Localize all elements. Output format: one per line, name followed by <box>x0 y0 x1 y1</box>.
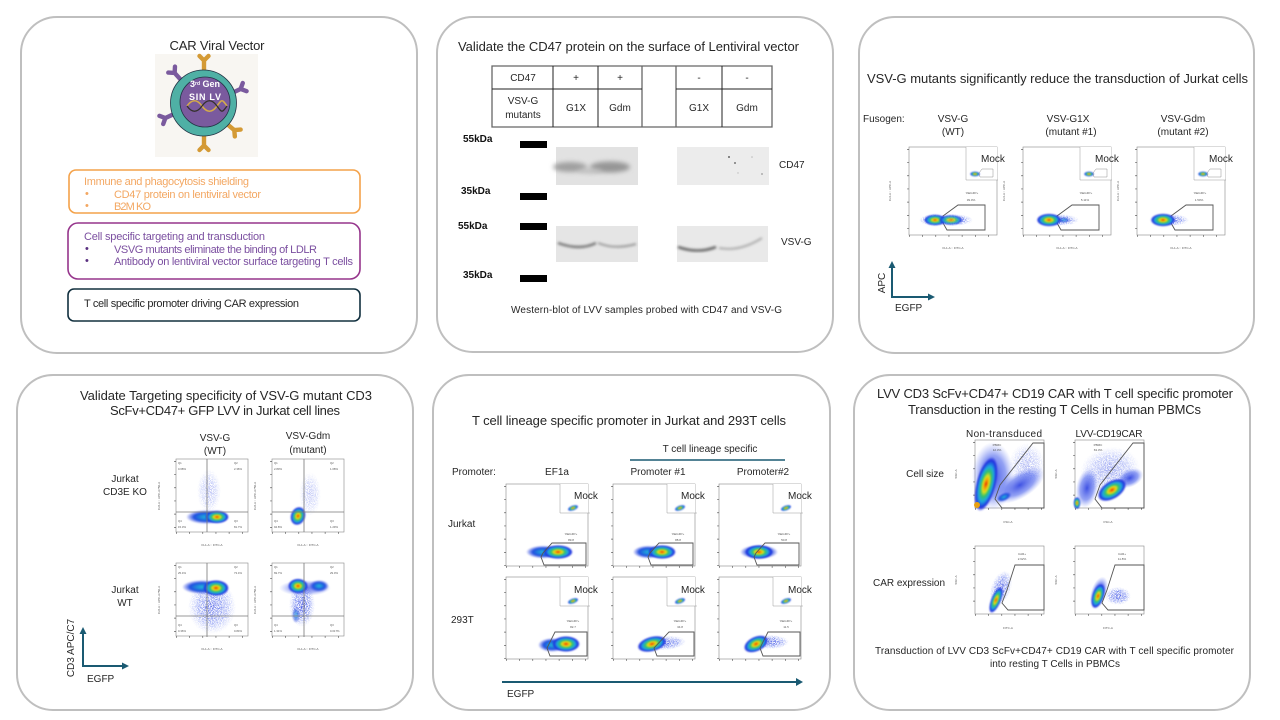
row and column labels <box>448 467 790 626</box>
flow plot: CD3E KO, WT <box>157 459 248 547</box>
flow plot: VSV-Gdm: %EGFP+ <box>1194 191 1207 195</box>
mock labels: Mock <box>574 585 599 596</box>
bracket: T cell lineage specific: T cell lineage specific <box>663 444 757 455</box>
column labels: VSV-G1X <box>1047 114 1090 125</box>
flow plot: VSV-Gdm: 1.50% <box>1195 198 1204 202</box>
flow plot: 293T promoter 1 <box>612 577 697 660</box>
arrow: EGFP axis <box>502 678 803 700</box>
blot: CD47 negative <box>677 147 769 185</box>
flow plot: VSV-Gdm: Mock <box>1209 154 1234 165</box>
label: CD47: CD47 <box>779 160 805 171</box>
flow plot: VSV-G1X: Mock <box>1095 154 1120 165</box>
heading: LVV CD19 CAR <box>877 386 1234 417</box>
flow plot: CAR transduced: SSC-A <box>1054 575 1058 585</box>
heading: LVV CD19 CAR: Transduction in the resting T Cells in human PBMCs <box>908 402 1202 417</box>
flow plot: CD3E KO, WT: Q4 <box>178 519 182 523</box>
table: sample layout: Gdm <box>609 103 631 114</box>
row and column labels: WT <box>117 598 133 609</box>
flow plot: CAR non-transduced: 2.62% <box>1018 557 1027 561</box>
flow plot: CD3E KO, mutant: Q3 <box>330 519 334 523</box>
caption: transduction: Transduction of LVV CD3 ScFv+CD47+ CD19 CAR with T cell specific promoter <box>875 646 1235 657</box>
flow plot: CD3E KO, WT: FL1-A :: FITC-A <box>201 543 223 547</box>
row and column labels: (mutant) <box>289 445 327 456</box>
molecular weight markers: 55kDa <box>458 221 488 232</box>
molecular weight markers: 35kDa <box>463 270 493 281</box>
column labels <box>863 114 1209 138</box>
heading: CAR Viral Vector: CAR Viral Vector <box>170 38 265 53</box>
callout: cell specific targeting: VSVG mutants eliminate the binding of LDLR <box>114 244 317 256</box>
flow plot: Jurkat WT, mutant: Q4 <box>274 623 278 627</box>
flow plot: Jurkat promoter 2 <box>718 484 803 567</box>
row and column labels: EF1a <box>545 467 569 478</box>
table: sample layout: VSV-G <box>508 96 538 107</box>
arrow: APC vs EGFP axes: APC <box>877 273 888 293</box>
arrow: CD3 vs EGFP axes: CD3 APC/C7 <box>66 618 77 677</box>
row and column labels: VSV-G <box>200 433 230 444</box>
panel: CAR viral vector <box>21 17 417 353</box>
heading: validate targeting: ScFv+CD47+ GFP LVV in Jurkat cell lines <box>110 403 340 418</box>
heading: validate targeting <box>80 388 372 418</box>
heading: LVV CD19 CAR: LVV CD3 ScFv+CD47+ CD19 CAR with T cell specific promoter <box>877 386 1234 401</box>
flow plot: CD3E KO, WT: FL8-A :: APC-A750-A <box>157 482 161 510</box>
table: sample layout: Gdm <box>736 103 758 114</box>
flow plot: CAR non-transduced: SSC-A <box>954 575 958 585</box>
flow plot: Jurkat WT, WT: FL1-A :: FITC-A <box>201 647 223 651</box>
mock labels <box>574 491 813 596</box>
callout: T cell promoter: T cell specific promoter driving CAR expression <box>84 298 299 310</box>
flow plot: Jurkat WT, mutant: Q3 <box>330 623 334 627</box>
flow plot: VSV-G1X: 5.11% <box>1081 198 1089 202</box>
flow plot: cell size non-transduced: 12.3% <box>993 448 1002 452</box>
panel: targeting specificity <box>17 375 413 710</box>
table: sample layout <box>492 66 772 127</box>
flow plot: CD3E KO, mutant: 2.80% <box>274 467 282 471</box>
flow plot: Jurkat promoter 1 <box>612 484 697 567</box>
icon: lentiviral vector particle: Gen <box>200 79 220 89</box>
flow plot: cell size non-transduced: FSC-A <box>1004 520 1012 524</box>
flow plot: cell size transduced: FSC-A <box>1104 520 1112 524</box>
mock labels: Mock <box>788 585 813 596</box>
flow plot: CAR transduced: CAR+ <box>1118 552 1126 556</box>
flow plot: Jurkat promoter 2: %EGFP+ <box>778 532 791 536</box>
column labels: (WT) <box>942 127 964 138</box>
caption: transduction: into resting T Cells in PBMCs <box>990 659 1120 670</box>
blot: CD47 positive <box>553 147 638 185</box>
arrow: APC vs EGFP axes: EGFP <box>895 303 923 314</box>
row and column labels: CD3E KO <box>103 487 147 498</box>
arrow: CD3 vs EGFP axes: EGFP <box>87 674 115 685</box>
callout: T cell promoter <box>68 289 360 321</box>
flow plot: VSV-G WT: 39.0% <box>967 198 976 202</box>
flow plot: Jurkat EF1a: 89.8 <box>568 538 574 542</box>
table: sample layout: CD47 <box>510 73 536 84</box>
row and column labels: Jurkat <box>111 474 139 485</box>
table: sample layout: - <box>697 73 701 84</box>
heading: validate targeting: Validate Targeting specificity of VSV-G mutant CD3 <box>80 388 372 403</box>
heading: VSV-G mutants: VSV-G mutants significantly reduce the transduction of Jurkat cells <box>867 71 1248 86</box>
flow plot: Jurkat promoter 1: %EGFP+ <box>672 532 685 536</box>
flow plot: VSV-G WT <box>888 147 1006 250</box>
flow plot: cell size transduced: PBMC <box>1094 443 1103 447</box>
flow plot: Jurkat EF1a <box>505 484 590 567</box>
mock labels: Mock <box>681 585 706 596</box>
callout: immune shielding: Immune and phagocytosis shielding <box>84 176 249 188</box>
row and column labels <box>873 429 1142 589</box>
flow plot: VSV-G1X: FL6-A :: APC-A <box>1002 181 1006 201</box>
flow plot: 293T promoter 2 <box>718 577 803 660</box>
row and column labels: CAR expression <box>873 578 945 589</box>
flow plot: CAR non-transduced <box>954 546 1044 630</box>
column labels: VSV-Gdm <box>1161 114 1205 125</box>
caption: transduction <box>875 646 1235 670</box>
flow plot: CD3E KO, WT: 15.3% <box>178 525 186 529</box>
callout: cell specific targeting: Cell specific targeting and transduction <box>84 231 265 243</box>
flow plot: 293T EF1a: %EGFP+ <box>567 619 580 623</box>
flow plot: VSV-G1X <box>1002 147 1120 250</box>
flow plot: VSV-G WT: %EGFP+ <box>966 191 979 195</box>
flow plot: VSV-G WT: FL1-A :: FITC-A <box>942 246 964 250</box>
mock labels: Mock <box>574 491 599 502</box>
flow plot: Jurkat WT, WT: 73.4% <box>234 571 242 575</box>
flow plot: Jurkat WT, mutant: FL8-A :: APC-A750-A <box>253 586 257 614</box>
table: sample layout: + <box>573 73 579 84</box>
heading: T cell lineage promoter: T cell lineage specific promoter in Jurkat and 293T cells <box>472 413 786 428</box>
flow plot: Jurkat WT, WT: Q3 <box>234 623 238 627</box>
flow plot: 293T promoter 2: 11.5 <box>783 625 789 629</box>
flow plot: 293T EF1a <box>505 577 590 660</box>
table: sample layout: mutants <box>505 110 541 121</box>
row and column labels: (WT) <box>204 446 226 457</box>
flow plot: CD3E KO, WT: Q2 <box>234 461 238 465</box>
flow plot: Jurkat WT, mutant: 29.0% <box>330 571 338 575</box>
flow plot: 293T promoter 1: 34.8 <box>677 625 683 629</box>
flow plot: cell size non-transduced: PBMC <box>993 443 1002 447</box>
heading: validate CD47: Validate the CD47 protein on the surface of Lentiviral vector <box>458 39 800 54</box>
flow plot: CD3E KO, mutant: FL1-A :: FITC-A <box>297 543 319 547</box>
flow plot: Jurkat WT, mutant: Q2 <box>330 565 334 569</box>
icon: lentiviral vector particle: 3 <box>190 79 195 89</box>
flow plot: CD3E KO, mutant <box>253 459 344 547</box>
flow plot: cell size transduced <box>1054 440 1146 524</box>
panel: resting T cell transduction <box>854 375 1250 710</box>
callout: cell specific targeting: • <box>85 243 89 255</box>
flow plot: Jurkat WT, WT: Q4 <box>178 623 182 627</box>
blot: VSV-G right <box>677 226 768 262</box>
flow plot: cell size non-transduced: SSC-A <box>954 469 958 479</box>
flow plot: CAR transduced: 11.8% <box>1118 557 1126 561</box>
flow plot: Jurkat WT, WT: Q2 <box>234 565 238 569</box>
flow plot: cell size transduced: SSC-A <box>1054 469 1058 479</box>
flow plot: Jurkat WT, mutant: 0.017% <box>330 629 340 633</box>
row and column labels: Jurkat <box>111 585 139 596</box>
flow plot: 293T EF1a: 82.7 <box>570 625 576 629</box>
flow plot: cell size non-transduced <box>954 440 1051 524</box>
panel: VSV-G mutants transduction <box>859 17 1254 353</box>
flow plot: VSV-G1X: FL1-A :: FITC-A <box>1056 246 1078 250</box>
mock labels: Mock <box>788 491 813 502</box>
flow plot: 293T promoter 1: %EGFP+ <box>674 619 687 623</box>
panel: CD47 western blot <box>437 17 833 352</box>
table: sample layout: - <box>745 73 749 84</box>
flow plot: CD3E KO, WT: Q1 <box>178 461 182 465</box>
row and column labels: 293T <box>451 615 474 626</box>
flow plot: VSV-Gdm: FL6-A :: APC-A <box>1116 181 1120 201</box>
label: VSV-G: VSV-G <box>781 237 812 248</box>
flow plot: CD3E KO, mutant: 1.29% <box>330 525 338 529</box>
arrow: CD3 vs EGFP axes <box>66 618 129 685</box>
panel: T cell lineage promoter <box>433 375 830 710</box>
flow plot: Jurkat WT, mutant: FL1-A :: FITC-A <box>297 647 319 651</box>
callout: cell specific targeting: Antibody on lentiviral vector surface targeting T cells <box>114 256 354 268</box>
row and column labels: LVV-CD19CAR <box>1076 429 1142 440</box>
row and column labels: Promoter#2 <box>737 467 790 478</box>
flow plot: Jurkat WT, WT: 25.4% <box>178 571 186 575</box>
flow plot: VSV-G WT: FL6-A :: APC-A <box>888 181 892 201</box>
flow plot: Jurkat WT, WT: FL8-A :: APC-A750-A <box>157 586 161 614</box>
arrow: EGFP axis: EGFP <box>507 689 535 700</box>
flow plot: cell size transduced: 63.3% <box>1094 448 1103 452</box>
flow plot: Jurkat promoter 1: 88.8 <box>675 538 681 542</box>
table: sample layout: G1X <box>566 103 586 114</box>
column labels: Fusogen: <box>863 114 905 125</box>
table: sample layout: G1X <box>689 103 709 114</box>
flow plot: CAR non-transduced: FITC-A <box>1003 626 1013 630</box>
flow plot: Jurkat WT, mutant: 1.31% <box>274 629 282 633</box>
flow plot: CD3E KO, WT: Q3 <box>234 519 238 523</box>
table: sample layout: + <box>617 73 623 84</box>
column labels: VSV-G <box>938 114 968 125</box>
flow plot: VSV-G1X: %EGFP+ <box>1080 191 1093 195</box>
flow plot: Jurkat promoter 2: 50.8 <box>781 538 787 542</box>
flow plot: Jurkat WT, WT <box>157 563 248 651</box>
callout: immune shielding: CD47 protein on lentiviral vector <box>114 189 261 201</box>
flow plot: Jurkat WT, WT: 0.84% <box>234 629 242 633</box>
icon: lentiviral vector particle: rd <box>195 81 200 87</box>
flow plot: CD3E KO, mutant: 1.08% <box>330 467 338 471</box>
callout: immune shielding: B2M KO <box>114 201 151 213</box>
row and column labels: Jurkat <box>448 519 475 530</box>
column labels: (mutant #1) <box>1045 127 1097 138</box>
row and column labels <box>103 431 330 609</box>
mock labels: Mock <box>681 491 706 502</box>
flow plot: Jurkat WT, WT: 0.36% <box>178 629 186 633</box>
row and column labels: Cell size <box>906 469 944 480</box>
callout: cell specific targeting <box>68 223 360 279</box>
flow plot: 293T promoter 2: %EGFP+ <box>780 619 793 623</box>
blot: VSV-G left <box>556 226 638 262</box>
flow plot: CD3E KO, WT: 0.68% <box>178 467 186 471</box>
flow plot: Jurkat WT, WT: Q1 <box>178 565 182 569</box>
flow plot: CD3E KO, WT: 2.36% <box>234 467 242 471</box>
callout: immune shielding: • <box>85 200 89 212</box>
callout: cell specific targeting: • <box>85 255 89 267</box>
arrow: APC vs EGFP axes <box>877 261 935 314</box>
flow plot: VSV-G WT: Mock <box>981 154 1006 165</box>
column labels: (mutant #2) <box>1157 127 1209 138</box>
flow plot: CAR transduced: FITC-A <box>1103 626 1113 630</box>
caption: western blot: Western-blot of LVV samples probed with CD47 and VSV-G <box>511 305 782 316</box>
flow plot: Jurkat WT, mutant: Q1 <box>274 565 278 569</box>
flow plot: CD3E KO, mutant: 94.8% <box>274 525 282 529</box>
flow plot: CD3E KO, mutant: FL8-A :: APC-A750-A <box>253 482 257 510</box>
flow plot: Jurkat WT, mutant <box>253 563 344 651</box>
flow plot: CD3E KO, mutant: Q2 <box>330 461 334 465</box>
flow plot: VSV-Gdm <box>1116 147 1234 250</box>
row and column labels: Promoter: <box>452 467 496 478</box>
flow plot: CAR non-transduced: CAR+ <box>1018 552 1026 556</box>
icon: lentiviral vector particle <box>155 54 258 157</box>
molecular weight markers <box>458 134 547 282</box>
molecular weight markers: 55kDa <box>463 134 493 145</box>
flow plot: VSV-Gdm: FL1-A :: FITC-A <box>1170 246 1192 250</box>
icon: lentiviral vector particle: SIN LV <box>189 92 221 102</box>
molecular weight markers: 35kDa <box>461 186 491 197</box>
flow plot: Jurkat EF1a: %EGFP+ <box>565 532 578 536</box>
flow plot: Jurkat WT, mutant: 69.7% <box>274 571 282 575</box>
flow plot: CD3E KO, WT: 81.7% <box>234 525 242 529</box>
row and column labels: Non-transduced <box>966 429 1042 440</box>
flow plot: CD3E KO, mutant: Q4 <box>274 519 278 523</box>
row and column labels: Promoter #1 <box>630 467 686 478</box>
callout: immune shielding: • <box>85 188 89 200</box>
row and column labels: VSV-Gdm <box>286 431 330 442</box>
flow plot: CD3E KO, mutant: Q1 <box>274 461 278 465</box>
callout: immune shielding <box>69 170 360 213</box>
flow plot: CAR transduced <box>1054 546 1144 630</box>
